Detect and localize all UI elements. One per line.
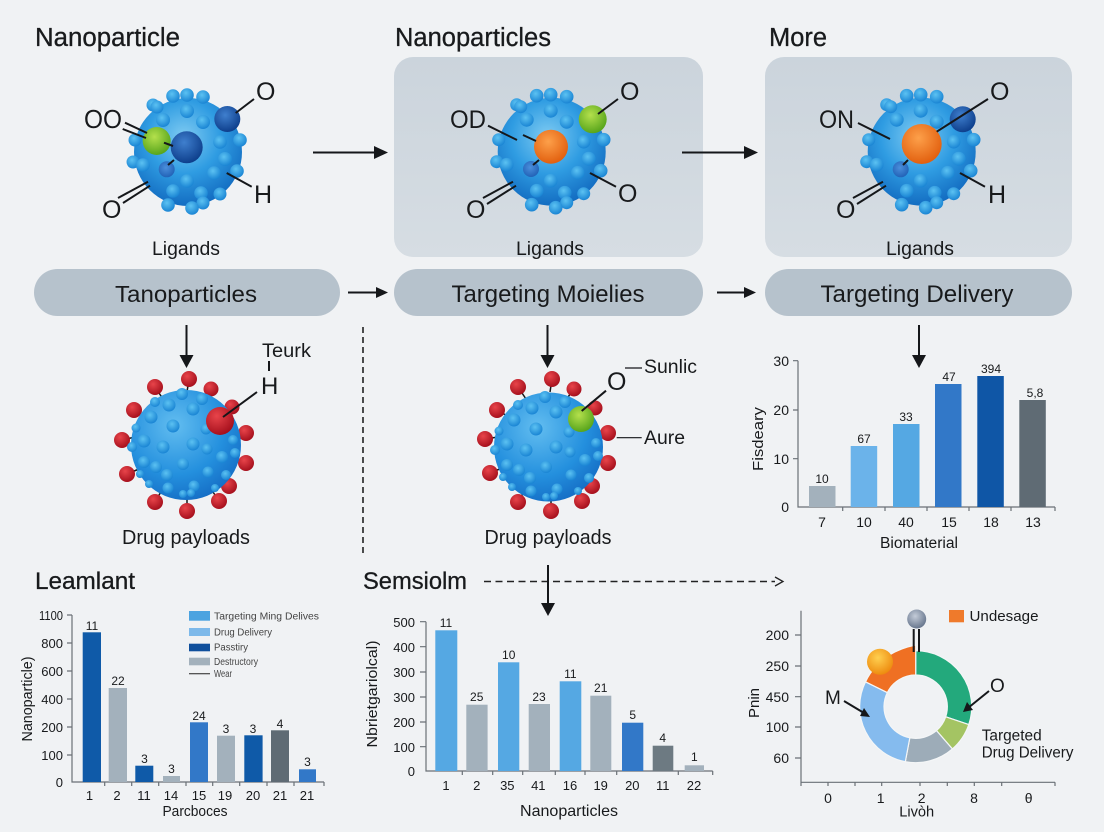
label: Ligands 2: Ligands	[516, 239, 584, 260]
nanoparticle diagram 1: O	[256, 78, 275, 106]
bar chart: Nanoparticles: 5	[629, 708, 636, 722]
bar chart: Nanoparticles: 300	[393, 690, 415, 705]
bar chart: Biomaterial: 15	[941, 514, 957, 530]
bar chart: Leamlant: 11	[86, 619, 99, 633]
bar chart: Nanoparticles: 1	[442, 778, 450, 793]
callout: M	[825, 688, 870, 717]
bar chart: Leamlant: 2	[113, 788, 121, 803]
bar chart: Nanoparticles: 22	[687, 778, 701, 793]
bar chart: Leamlant: 0	[56, 775, 63, 790]
nanoparticle diagram 3: O	[836, 196, 855, 224]
nanoparticle diagram 1	[84, 78, 275, 224]
panel: nanoparticles backdrop	[394, 57, 703, 257]
pill: Targeting Delivery: Targeting Delivery	[820, 281, 1014, 308]
bar chart: Biomaterial: 5,8	[1027, 386, 1044, 400]
bar chart: Nanoparticles: 21	[594, 681, 608, 695]
bar chart: Nanoparticles: Nbrietgariolcal)	[364, 641, 381, 747]
bar chart: Biomaterial: Fisdeary	[750, 406, 767, 471]
donut chart: 60	[773, 750, 789, 766]
donut chart: 8	[970, 790, 978, 806]
nanoparticle diagram 3: H	[988, 181, 1006, 209]
bar chart: Biomaterial: 394	[981, 362, 1001, 376]
bar chart: Nanoparticles: 35	[500, 778, 515, 793]
payload particle 1	[114, 341, 312, 519]
arrow: top row 1	[313, 146, 388, 159]
bar chart: Biomaterial: 10	[856, 514, 872, 530]
donut chart: Pnin	[746, 688, 763, 718]
donut chart: 200	[766, 627, 789, 643]
bar chart: Nanoparticles: 41	[531, 778, 546, 793]
nanoparticle diagram 2	[450, 78, 639, 224]
bar chart: Nanoparticles: 19	[593, 778, 608, 793]
pill: Targeting Moielies	[394, 269, 703, 316]
payload particle 2: Aure	[644, 428, 685, 449]
legend	[189, 611, 319, 680]
payload particle 2: O	[607, 368, 626, 396]
donut chart: Livòh	[899, 804, 934, 821]
bar chart: Leamlant: 800	[41, 636, 63, 651]
label: Drug payloads 1: Drug payloads	[122, 526, 250, 549]
bar chart: Leamlant: Parcboces	[162, 803, 228, 820]
legend: Drug Delivery	[214, 628, 272, 638]
bar chart: Biomaterial: 67	[857, 432, 871, 446]
heading: Nanoparticle: Nanoparticle	[35, 24, 180, 52]
nanoparticle diagram 2: O	[466, 196, 485, 224]
bar chart: Nanoparticles: 2	[473, 778, 480, 793]
bar chart: Biomaterial: 0	[781, 499, 789, 515]
bar chart: Nanoparticles: 11	[564, 667, 577, 681]
bar chart: Nanoparticles: 25	[470, 690, 484, 704]
bar chart: Nanoparticles: 4	[659, 731, 666, 745]
callout: O	[963, 676, 1005, 712]
bar chart: Nanoparticles: 400	[393, 640, 415, 655]
callout: M: M	[825, 688, 841, 709]
bar chart: Biomaterial: Biomaterial	[880, 535, 958, 552]
pill: Targeting Delivery	[765, 269, 1072, 316]
nanoparticle diagram 3: O	[990, 78, 1009, 106]
label: Drug payloads 2: Drug payloads	[484, 526, 612, 549]
donut chart: θ	[1025, 790, 1033, 806]
bar chart: Nanoparticles: 16	[563, 778, 577, 793]
payload particle 1: Teurk	[262, 341, 312, 362]
bar chart: Leamlant: 14	[164, 788, 178, 803]
nanoparticle diagram 1: O	[102, 196, 121, 224]
bar chart: Biomaterial: 33	[899, 410, 913, 424]
pill: Tanoparticles	[34, 269, 340, 316]
bar chart: Leamlant: 21	[300, 788, 314, 803]
nanoparticle diagram 3: ON	[819, 106, 854, 134]
bar chart: Nanoparticles: 11	[440, 616, 453, 630]
bar chart: Biomaterial: 10	[773, 451, 789, 467]
legend: Undesage: Undesage	[970, 608, 1038, 625]
bar chart: Biomaterial: 10	[815, 472, 829, 486]
nanoparticle diagram 2: O	[618, 180, 637, 208]
bar chart: Nanoparticles: 1	[691, 750, 698, 764]
bar chart: Leamlant: 3	[168, 762, 175, 776]
arrow: down 2	[540, 325, 554, 368]
heading: Nanoparticles: Nanoparticles	[395, 24, 551, 52]
dashed divider	[362, 327, 364, 553]
nanoparticle diagram 2: OD	[450, 106, 486, 134]
heading: Semsiolm: Semsiolm	[363, 568, 467, 595]
nanoparticle diagram 3	[819, 78, 1009, 224]
nanoparticle diagram 2: O	[620, 78, 639, 106]
bar chart: Leamlant: 4	[277, 717, 284, 731]
bar chart: Biomaterial: 18	[983, 514, 999, 530]
donut chart: 1	[877, 790, 885, 806]
bar chart: Leamlant: 3	[250, 722, 257, 736]
label: Ligands 3: Ligands	[886, 239, 954, 260]
legend: Wear	[214, 669, 233, 680]
heading: Leamlant: Leamlant	[35, 568, 135, 595]
bar chart: Biomaterial	[750, 353, 1055, 552]
label: Targeted Drug Delivery: Targeted	[982, 728, 1042, 745]
bar chart: Nanoparticles: 23	[532, 690, 546, 704]
bar chart: Leamlant: 100	[41, 748, 63, 763]
label: Targeted Drug Delivery: Drug Delivery	[982, 745, 1074, 762]
bar chart: Biomaterial: 40	[898, 514, 914, 530]
bar chart: Biomaterial: 20	[773, 402, 789, 418]
donut chart: 450	[766, 689, 789, 705]
bar chart: Nanoparticles: 0	[408, 764, 415, 779]
bar chart: Leamlant: 20	[246, 788, 260, 803]
bar chart: Biomaterial: 7	[818, 514, 826, 530]
bar chart: Nanoparticles: 500	[393, 615, 415, 630]
arrow: down to chart	[541, 565, 555, 616]
arrow: down 3	[912, 325, 926, 368]
dashed arrow	[484, 577, 783, 586]
bar chart: Nanoparticles: 10	[502, 648, 516, 662]
donut chart: 250	[766, 658, 789, 674]
bar chart: Nanoparticles: 11	[656, 778, 669, 793]
bar chart: Nanoparticles: Nanoparticles	[520, 803, 618, 820]
legend: Passtiry	[214, 642, 248, 654]
bar chart: Nanoparticles: 100	[393, 740, 415, 755]
bar chart: Leamlant: 24	[192, 709, 206, 723]
bar chart: Leamlant: 11	[137, 788, 151, 803]
bar chart: Leamlant: 1100	[39, 608, 63, 623]
bar chart: Biomaterial: 13	[1025, 514, 1041, 530]
bar chart: Nanoparticles: 300	[393, 665, 415, 680]
heading: More: More	[769, 24, 827, 52]
bar chart: Leamlant: 1	[86, 788, 93, 803]
arrow: pill row 2	[717, 287, 756, 298]
label: Ligands 1: Ligands	[152, 239, 220, 260]
panel: more backdrop	[765, 57, 1072, 257]
bar chart: Nanoparticles: 200	[393, 715, 415, 730]
bar chart: Leamlant: 3	[304, 755, 311, 769]
pill: Tanoparticles: Tanoparticles	[115, 281, 257, 307]
nanoparticle diagram 1: OO	[84, 104, 122, 134]
bar chart: Leamlant	[20, 608, 324, 820]
bar chart: Nanoparticles	[364, 615, 713, 820]
bar chart: Leamlant: Nanoparticle)	[20, 656, 36, 742]
legend: Destructory	[214, 657, 258, 668]
payload particle 2	[477, 357, 697, 519]
bar chart: Leamlant: 3	[141, 752, 148, 766]
bar chart: Nanoparticles: 20	[625, 778, 640, 793]
arrow: top row 2	[682, 146, 758, 159]
bar chart: Leamlant: 600	[41, 664, 63, 679]
nanoparticle diagram 1: H	[254, 181, 272, 209]
callout: O: O	[990, 676, 1005, 697]
legend: Targeting Ming Delives	[214, 612, 319, 622]
bar chart: Leamlant: 22	[111, 674, 125, 688]
payload particle 2: Sunlic	[644, 357, 697, 378]
bar chart: Leamlant: 200	[41, 720, 63, 735]
donut chart	[746, 608, 1074, 821]
bar chart: Biomaterial: 30	[773, 353, 789, 369]
pill: Targeting Moielies: Targeting Moielies	[452, 281, 644, 308]
bar chart: Leamlant: 400	[41, 692, 63, 707]
donut chart: 0	[824, 790, 832, 806]
bar chart: Leamlant: 21	[273, 788, 287, 803]
donut chart: 100	[766, 719, 789, 735]
arrow: pill row 1	[348, 287, 388, 298]
label: Targeted Drug Delivery	[982, 728, 1074, 762]
arrow: down 1	[180, 325, 194, 368]
bar chart: Leamlant: 19	[218, 788, 232, 803]
payload particle 1: H	[261, 373, 278, 400]
donut chart: 2	[918, 790, 926, 806]
bar chart: Leamlant: 3	[223, 722, 230, 736]
bar chart: Leamlant: 15	[192, 788, 206, 803]
bar chart: Biomaterial: 47	[942, 370, 956, 384]
